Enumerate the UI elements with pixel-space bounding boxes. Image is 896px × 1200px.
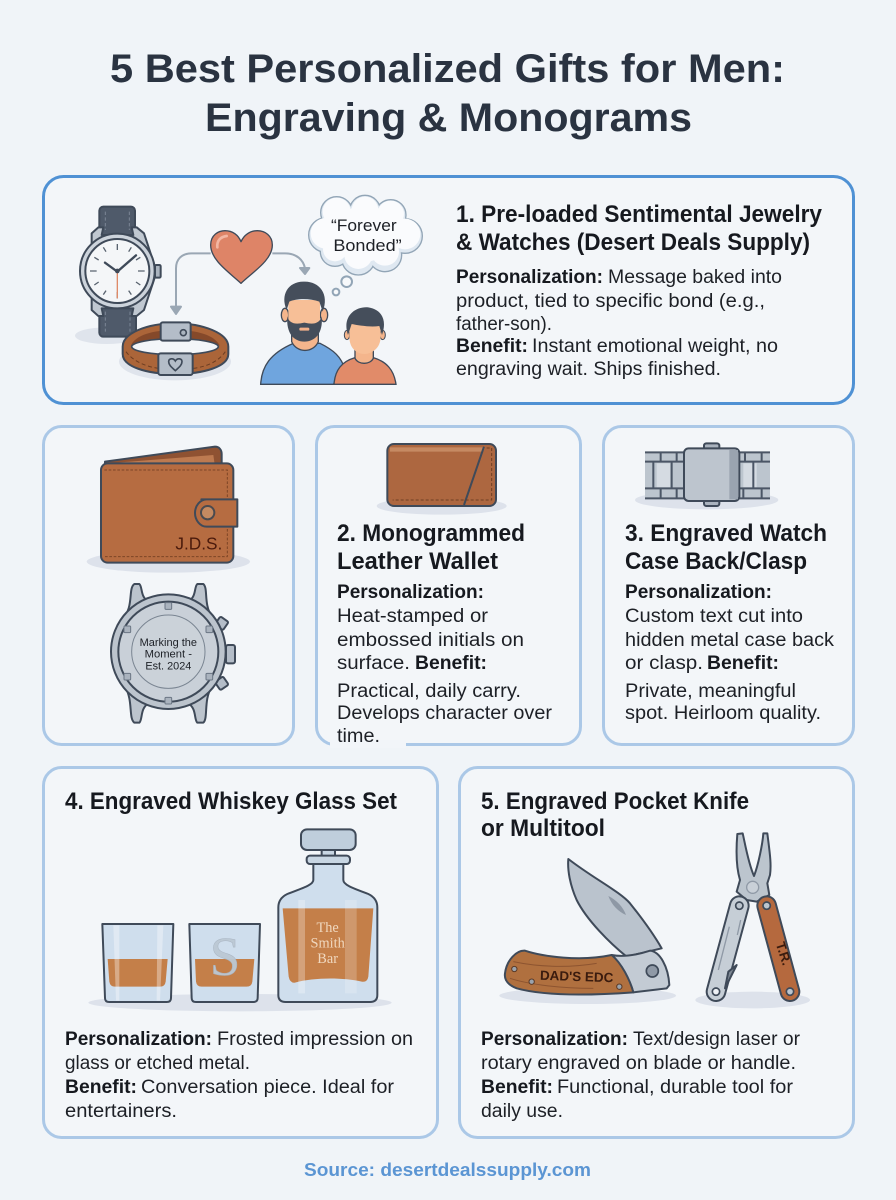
icon: monogrammed bifold wallet: J.D.S. xyxy=(175,533,222,553)
icon: monogrammed whiskey glass: S xyxy=(210,926,240,987)
text block: item 4 details: Benefit: xyxy=(65,1077,137,1098)
heading: item 1 xyxy=(456,201,823,256)
text block: item 1 details: Instant emotional weight, no xyxy=(532,336,778,357)
icon: son xyxy=(334,307,396,384)
heading: item 3: Case Back/Clasp xyxy=(625,548,807,575)
icon: multitool: T.R. xyxy=(773,940,794,967)
text block: item 3 details: Benefit: xyxy=(707,653,779,674)
text block: item 2 details: Practical, daily carry. xyxy=(337,681,521,702)
text block: item 5 details: Benefit: xyxy=(481,1077,553,1098)
icon: slim wallet xyxy=(377,444,507,515)
text block: item 1 details: Personalization: xyxy=(456,267,603,288)
heading: item 3 xyxy=(625,520,827,575)
heading: item 3: 3. Engraved Watch xyxy=(625,520,827,547)
text block: item 2 details: time. xyxy=(337,726,380,747)
heading: item 2: 2. Monogrammed xyxy=(337,520,525,547)
heading: item 1: & Watches (Desert Deals Supply) xyxy=(456,229,810,256)
text block: item 1 details xyxy=(456,267,782,380)
heading: item 5 xyxy=(481,788,749,842)
icon: decanter xyxy=(278,829,377,1002)
icon: wristwatch xyxy=(80,207,161,337)
text block: item 5 details xyxy=(481,1029,801,1122)
illustration: glasses and decanter xyxy=(88,829,392,1011)
icon: father xyxy=(261,282,345,384)
thought bubble: Bonded” xyxy=(333,236,402,255)
text block: item 3 details: Personalization: xyxy=(625,582,772,603)
title: Engraving & Monograms xyxy=(205,96,692,140)
text block: item 5 details: daily use. xyxy=(481,1101,563,1122)
text block: item 2 details: Develops character over xyxy=(337,703,553,724)
icon: monogrammed whiskey glass xyxy=(189,924,260,1002)
illustration: knife and multitool xyxy=(499,833,810,1008)
source footer: Source: desertdealssupply.com xyxy=(304,1159,591,1180)
icon: engraved watch case back: Est. 2024 xyxy=(145,660,191,672)
text block: item 5 details: Personalization: xyxy=(481,1029,628,1050)
text block: item 5 details: rotary engraved on blade or handle. xyxy=(481,1053,796,1074)
icon: multitool xyxy=(695,833,810,1008)
icon: plain whiskey glass xyxy=(102,924,173,1002)
panel: wallet and watch illustrations xyxy=(44,426,294,744)
heading: item 4: 4. Engraved Whiskey Glass Set xyxy=(65,788,397,815)
text block: item 4 details: Personalization: xyxy=(65,1029,212,1050)
icon: metal watch clasp xyxy=(635,443,778,509)
icon: decanter: Bar xyxy=(317,951,338,967)
text block: item 3 details: Private, meaningful xyxy=(625,681,796,702)
icon: leather bracelet xyxy=(119,322,231,380)
heading: item 2: Leather Wallet xyxy=(337,548,498,575)
icon: heart xyxy=(211,231,272,283)
icon: engraved watch case back: Marking the xyxy=(140,637,197,649)
text block: item 4 details: entertainers. xyxy=(65,1101,177,1122)
icon: decanter: Smith xyxy=(311,936,345,952)
text block: item 1 details: product, tied to specific bond (e.g., xyxy=(456,291,765,312)
icon: monogrammed bifold wallet xyxy=(87,447,250,573)
text block: item 1 details: engraving wait. Ships finished. xyxy=(456,359,721,380)
panel: 5 engraved pocket knife or multitool xyxy=(460,768,854,1138)
heading: item 1: 1. Pre-loaded Sentimental Jewelry xyxy=(456,201,823,228)
text block: item 2 details: Benefit: xyxy=(415,653,487,674)
text block: item 2 details: surface. xyxy=(337,653,410,674)
panel: 1 sentimental jewelry and watches xyxy=(44,176,854,404)
illustration: watch, bracelet, heart, father and son xyxy=(75,196,422,384)
text block: item 5 details: Text/design laser or xyxy=(633,1029,801,1050)
title xyxy=(110,47,785,140)
heading: item 5: or Multitool xyxy=(481,815,605,842)
text block: item 1 details: Message baked into xyxy=(608,267,782,288)
text block: item 5 details: Functional, durable tool for xyxy=(557,1077,794,1098)
text block: item 4 details: Frosted impression on xyxy=(217,1029,413,1050)
arrow: heart to father and son xyxy=(272,253,309,274)
panel: 2 monogrammed leather wallet xyxy=(316,426,580,748)
text block: item 4 details: Conversation piece. Ideal for xyxy=(141,1077,395,1098)
text block: item 3 details xyxy=(625,582,835,724)
text block: item 3 details: or clasp. xyxy=(625,653,703,674)
text block: item 3 details: spot. Heirloom quality. xyxy=(625,703,821,724)
text block: item 4 details: glass or etched metal. xyxy=(65,1053,250,1074)
text block: item 1 details: father-son). xyxy=(456,314,552,335)
icon: pocket knife: DAD'S EDC xyxy=(540,968,614,985)
text block: item 4 details xyxy=(65,1029,413,1122)
arrow: heart to bracelet xyxy=(171,253,211,314)
text block: item 3 details: hidden metal case back xyxy=(625,630,835,651)
icon: engraved watch case back xyxy=(111,584,235,723)
icon: pocket knife xyxy=(499,859,676,1004)
text block: item 3 details: Custom text cut into xyxy=(625,606,803,627)
thought bubble: “Forever xyxy=(331,216,397,235)
icon: decanter: The xyxy=(317,920,339,936)
text block: item 2 details: Heat-stamped or xyxy=(337,606,489,627)
text block: item 2 details xyxy=(337,582,553,747)
icon: engraved watch case back: Moment - xyxy=(145,649,192,661)
thought bubble xyxy=(309,196,422,295)
text block: item 1 details: Benefit: xyxy=(456,336,528,357)
panel: 4 engraved whiskey glass set xyxy=(44,768,438,1138)
text block: item 2 details: embossed initials on xyxy=(337,630,524,651)
heading: item 5: 5. Engraved Pocket Knife xyxy=(481,788,749,815)
panel: 3 engraved watch case back xyxy=(604,426,854,744)
title: 5 Best Personalized Gifts for Men: xyxy=(110,47,785,91)
text block: item 2 details: Personalization: xyxy=(337,582,484,603)
heading: item 2 xyxy=(337,520,525,575)
